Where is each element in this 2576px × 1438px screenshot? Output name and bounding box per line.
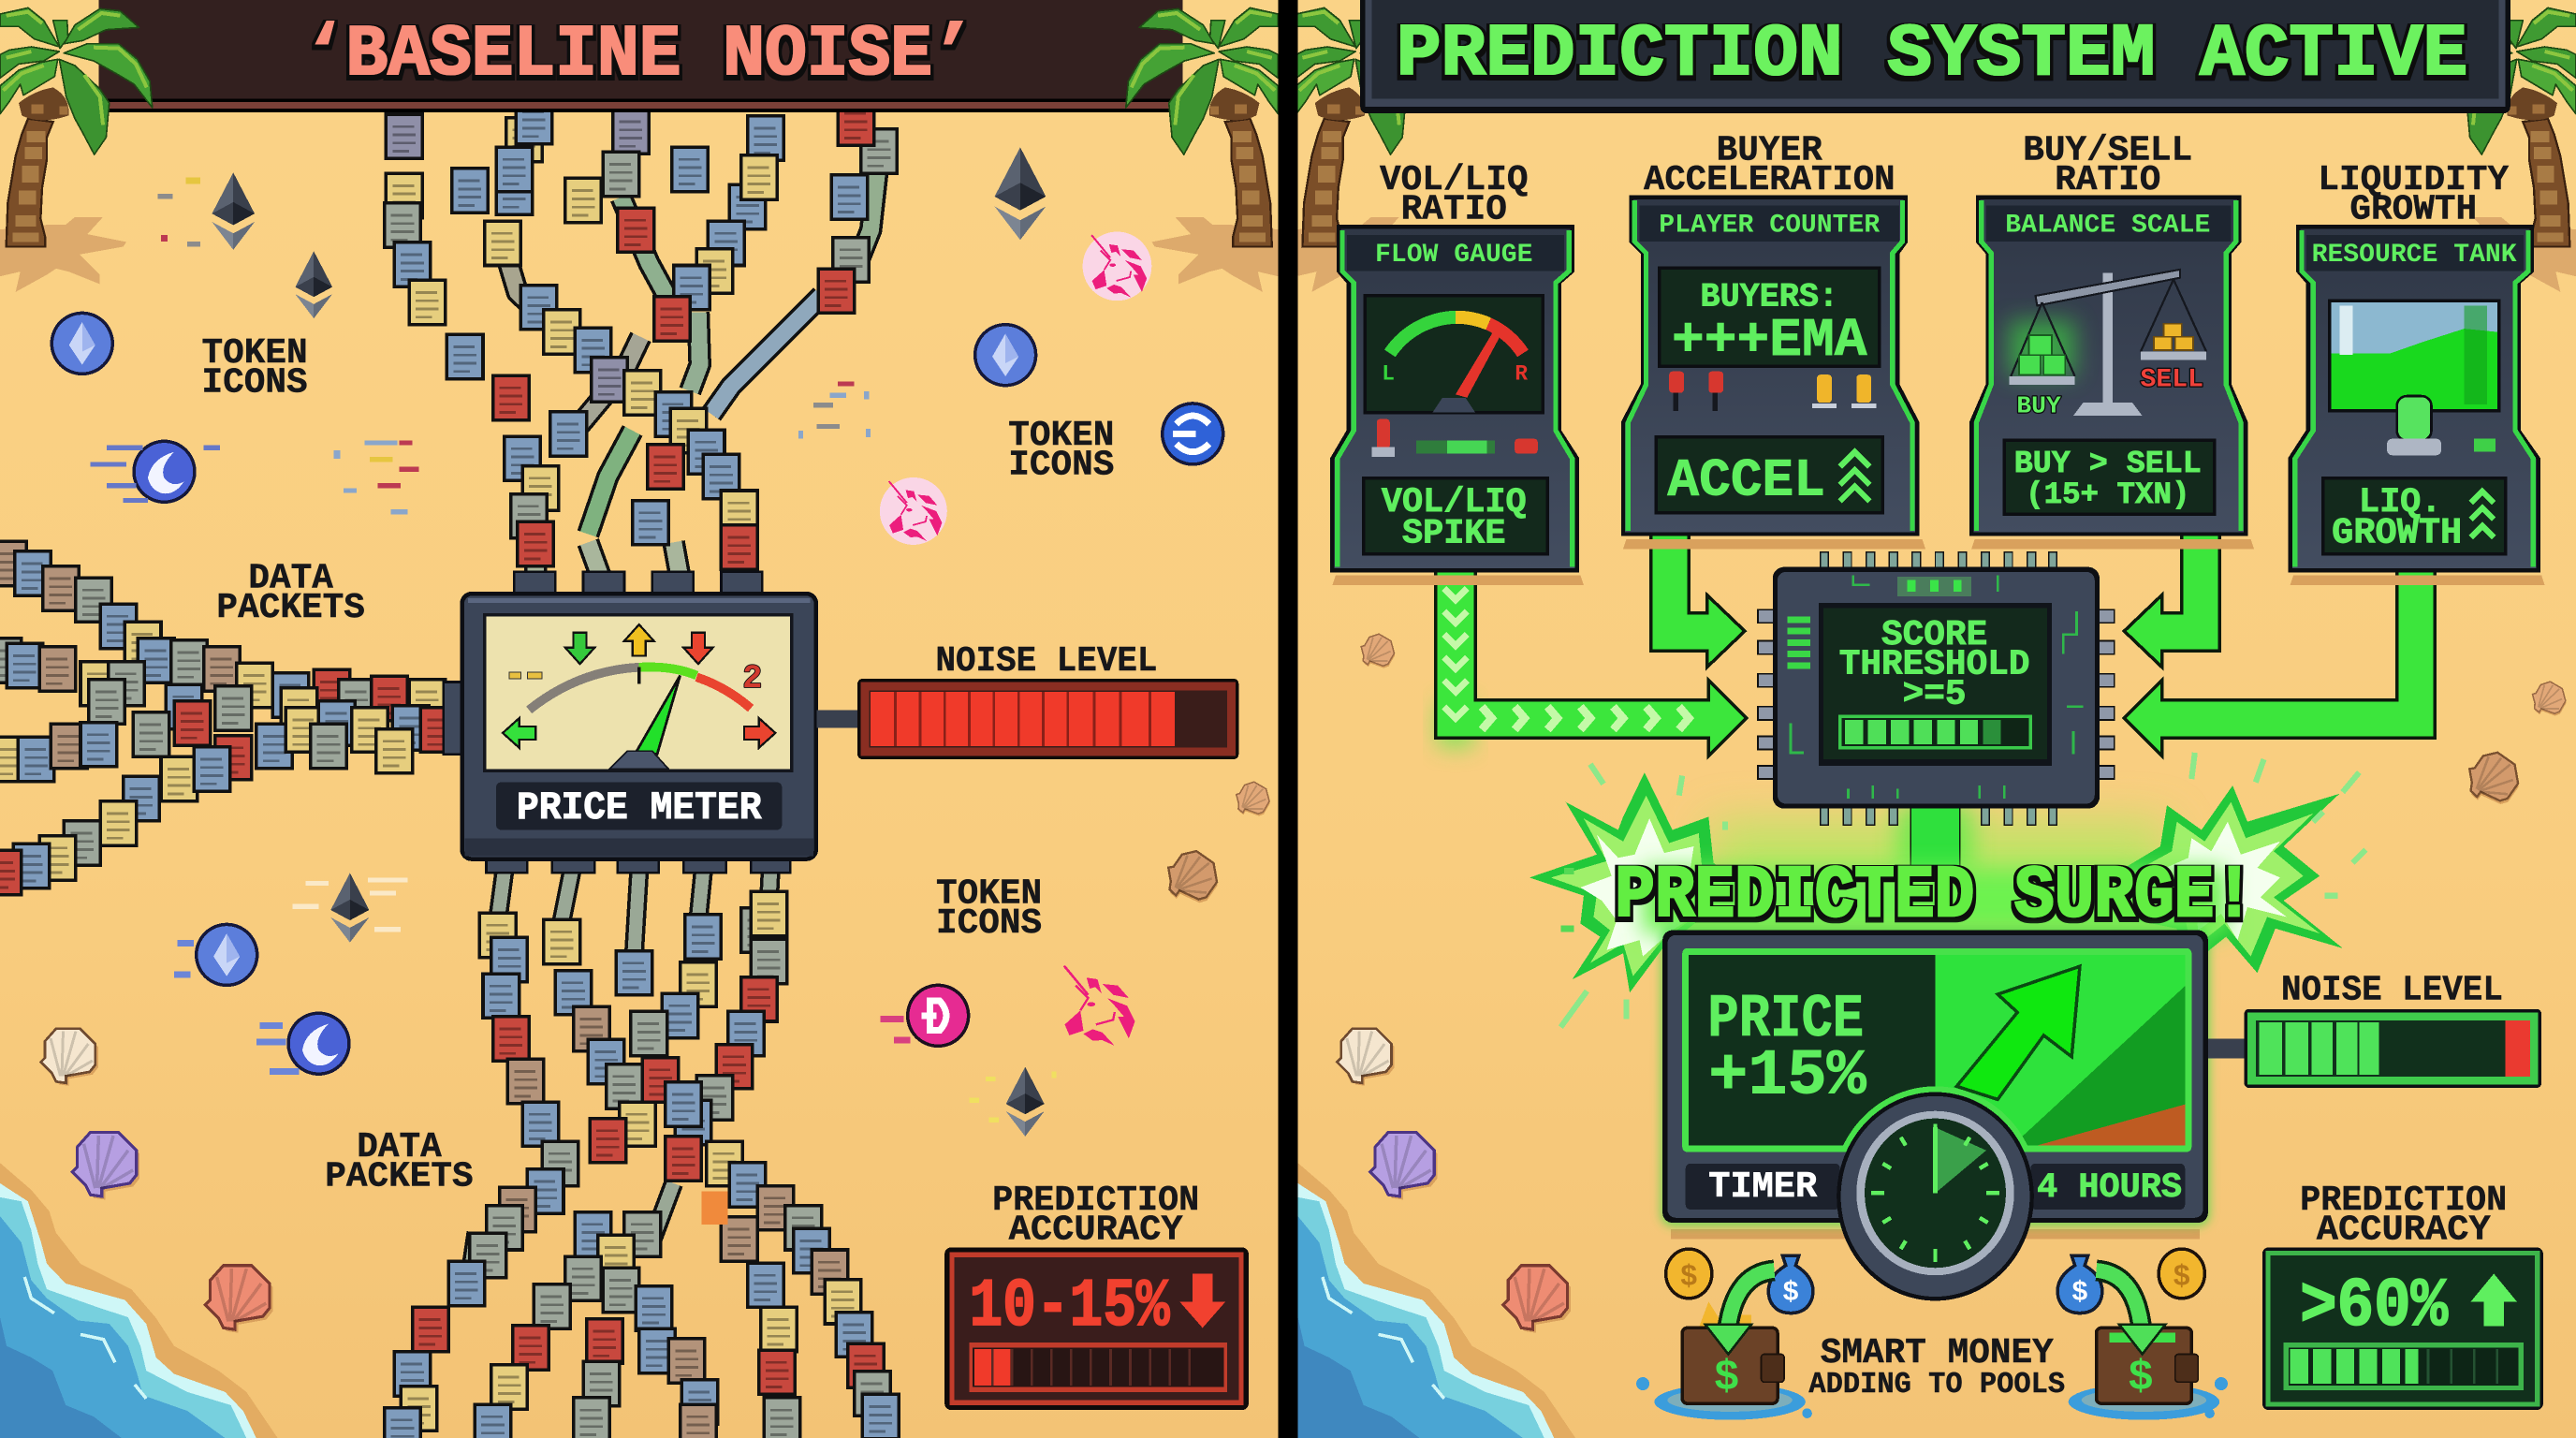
prediction accuracy: right: PREDICTION [2300,1181,2507,1221]
labels: token icons and data packets: DATA [357,1128,442,1167]
arrow: buy sell to score [2124,535,2219,668]
cabinet: flow gauge: SPIKE [1402,514,1506,553]
gauge arrows [503,624,775,748]
burst: right [2119,753,2365,973]
cabinet labels [1380,131,2509,229]
prediction panel: TIMER [1708,1167,1818,1208]
noise level label: NOISE LEVEL [2281,971,2503,1010]
prediction panel: +15% [1708,1039,1867,1112]
surge arrow [1956,966,2080,1099]
cabinet labels: BUY/SELL [2023,131,2192,170]
coin left [1666,1249,1712,1299]
ocean: right panel [1298,1163,1575,1438]
price meter plate [496,783,782,829]
ocean: left panel [0,1163,278,1438]
gauge needle [636,675,681,755]
labels: token icons and data packets: PACKETS [325,1158,474,1197]
prediction accuracy: right: ACCURACY [2317,1211,2491,1251]
noise level: left [816,642,1238,759]
connector: chip to surge [1708,802,2169,903]
title: baseline noise: ‘BASELINE NOISE’ [304,15,974,96]
cabinet: resource tank [2291,227,2545,585]
labels: token icons and data packets: ICONS [1008,446,1114,485]
arrow: liquidity to score [2124,570,2435,756]
prediction panel: PRICE [1707,985,1864,1054]
score chip: SCORE [1881,616,1987,655]
cabinet labels: GROWTH [2349,190,2477,229]
cabinet: player counter [1623,198,1925,549]
cabinet labels: RATIO [1401,190,1507,229]
prediction accuracy: right: >60% [2300,1269,2449,1346]
arrow: vol/liq to score [1436,570,1747,756]
prediction panel: 4 HOURS [2037,1168,2182,1208]
cabinet labels: RATIO [2055,161,2160,200]
tokens: left panel lower [174,873,1135,1137]
price meter [444,572,818,873]
labels: token icons and data packets: PACKETS [216,589,365,628]
labels: token icons and data packets: ICONS [936,904,1042,944]
cabinet: resource tank: GROWTH [2332,512,2462,553]
bag right [2057,1255,2102,1313]
cabinet labels: VOL/LIQ [1380,161,1528,200]
noise level label: NOISE LEVEL [936,642,1157,682]
prediction accuracy: left: 10-15% [970,1269,1170,1345]
cabinet: balance scale: SELL [2141,366,2203,395]
predicted surge text: PREDICTED SURGE! [1615,854,2254,938]
title: prediction system active: PREDICTION SYSTEM ACTIVE [1397,12,2467,96]
smart money: left wallet: $ [1782,1277,1799,1309]
smart money: right wallet: $ [2071,1277,2088,1309]
cabinet: flow gauge: FLOW GAUGE [1375,241,1533,270]
palms: left panel crowns over header [0,7,1278,292]
smart money: left wallet: $ [1680,1262,1698,1295]
smart money: right wallet: $ [2128,1353,2154,1401]
labels: token icons and data packets: ICONS [201,364,308,404]
smart money: right wallet [2057,1249,2228,1420]
labels: token icons and data packets: TOKEN [201,334,308,374]
cabinet labels: ACCELERATION [1644,161,1895,200]
cabinet: flow gauge [1332,227,1584,585]
labels: token icons and data packets: TOKEN [936,875,1042,915]
palm: right panel right [2467,7,2576,292]
price meter: 2 [742,660,762,697]
prediction accuracy: left [944,1181,1249,1410]
score chip: >=5 [1903,675,1967,714]
cabinet: balance scale: (15+ TXN) [2026,477,2189,512]
cabinet: balance scale: BUY [2016,392,2061,420]
score chip [1758,552,2115,825]
tokens: left panel upper [51,147,1224,545]
hours plate [2030,1164,2185,1210]
shells [41,629,2571,1333]
burst: left [1530,764,1741,1027]
green arrow left [1727,1270,1775,1340]
noise level: right [2208,971,2541,1088]
green arrow right [2097,1270,2143,1340]
panel divider [1278,0,1298,1438]
prediction panel [1661,927,2210,1240]
data packet strands: top [383,97,899,581]
surge banner [1615,854,2254,938]
cabinet: flow gauge: R [1515,362,1528,387]
arrow: buyer acceleration to score [1651,535,1745,668]
cabinet: player counter: BUYERS: [1701,279,1838,316]
cabinet: player counter: +++EMA [1672,311,1867,372]
smart money: left wallet [1636,1249,1813,1420]
cabinet: player counter: ACCEL [1667,450,1825,510]
cabinet: resource tank: RESOURCE TANK [2312,241,2517,270]
cabinet labels: LIQUIDITY [2318,161,2509,200]
cabinet: balance scale: BUY > SELL [2014,447,2202,482]
price meter: PRICE METER [517,785,762,830]
smart money caption: ADDING TO POOLS [1808,1369,2065,1401]
palm: right panel left [1297,7,1406,292]
prediction accuracy: right [2262,1181,2543,1410]
timer plate [1686,1164,1840,1210]
coin right [2159,1249,2204,1299]
cabinet: balance scale: BALANCE SCALE [2005,212,2210,241]
smart money: left wallet: $ [1714,1353,1739,1401]
smart money: right wallet: $ [2173,1262,2190,1295]
cabinet: player counter: PLAYER COUNTER [1659,212,1880,241]
clock [1832,1086,2039,1303]
data packet strands: left [0,540,459,897]
score chip: THRESHOLD [1839,646,2029,685]
panel: baseline noise background [0,0,1278,1438]
data packet strands: bottom [383,871,900,1438]
prediction accuracy: left: PREDICTION [992,1181,1199,1221]
labels: token icons and data packets [201,334,1114,1197]
cabinet: resource tank: LIQ. [2359,483,2441,522]
panel: prediction system background [1298,0,2576,1438]
prediction accuracy: left: ACCURACY [1009,1211,1183,1251]
cabinet labels: BUYER [1717,131,1822,170]
labels: token icons and data packets: TOKEN [1008,417,1114,456]
labels: token icons and data packets: DATA [248,560,333,599]
smart money caption: SMART MONEY [1821,1334,2054,1373]
cabinet: flow gauge: L [1382,362,1395,387]
bag left [1768,1255,1813,1313]
header: prediction system active [1360,0,2510,113]
cabinet: balance scale [1971,198,2254,549]
cabinet: flow gauge: VOL/LIQ [1382,483,1527,522]
header: baseline noise [98,0,1183,112]
gauge arcs [529,667,751,710]
smart money caption [1808,1334,2065,1401]
